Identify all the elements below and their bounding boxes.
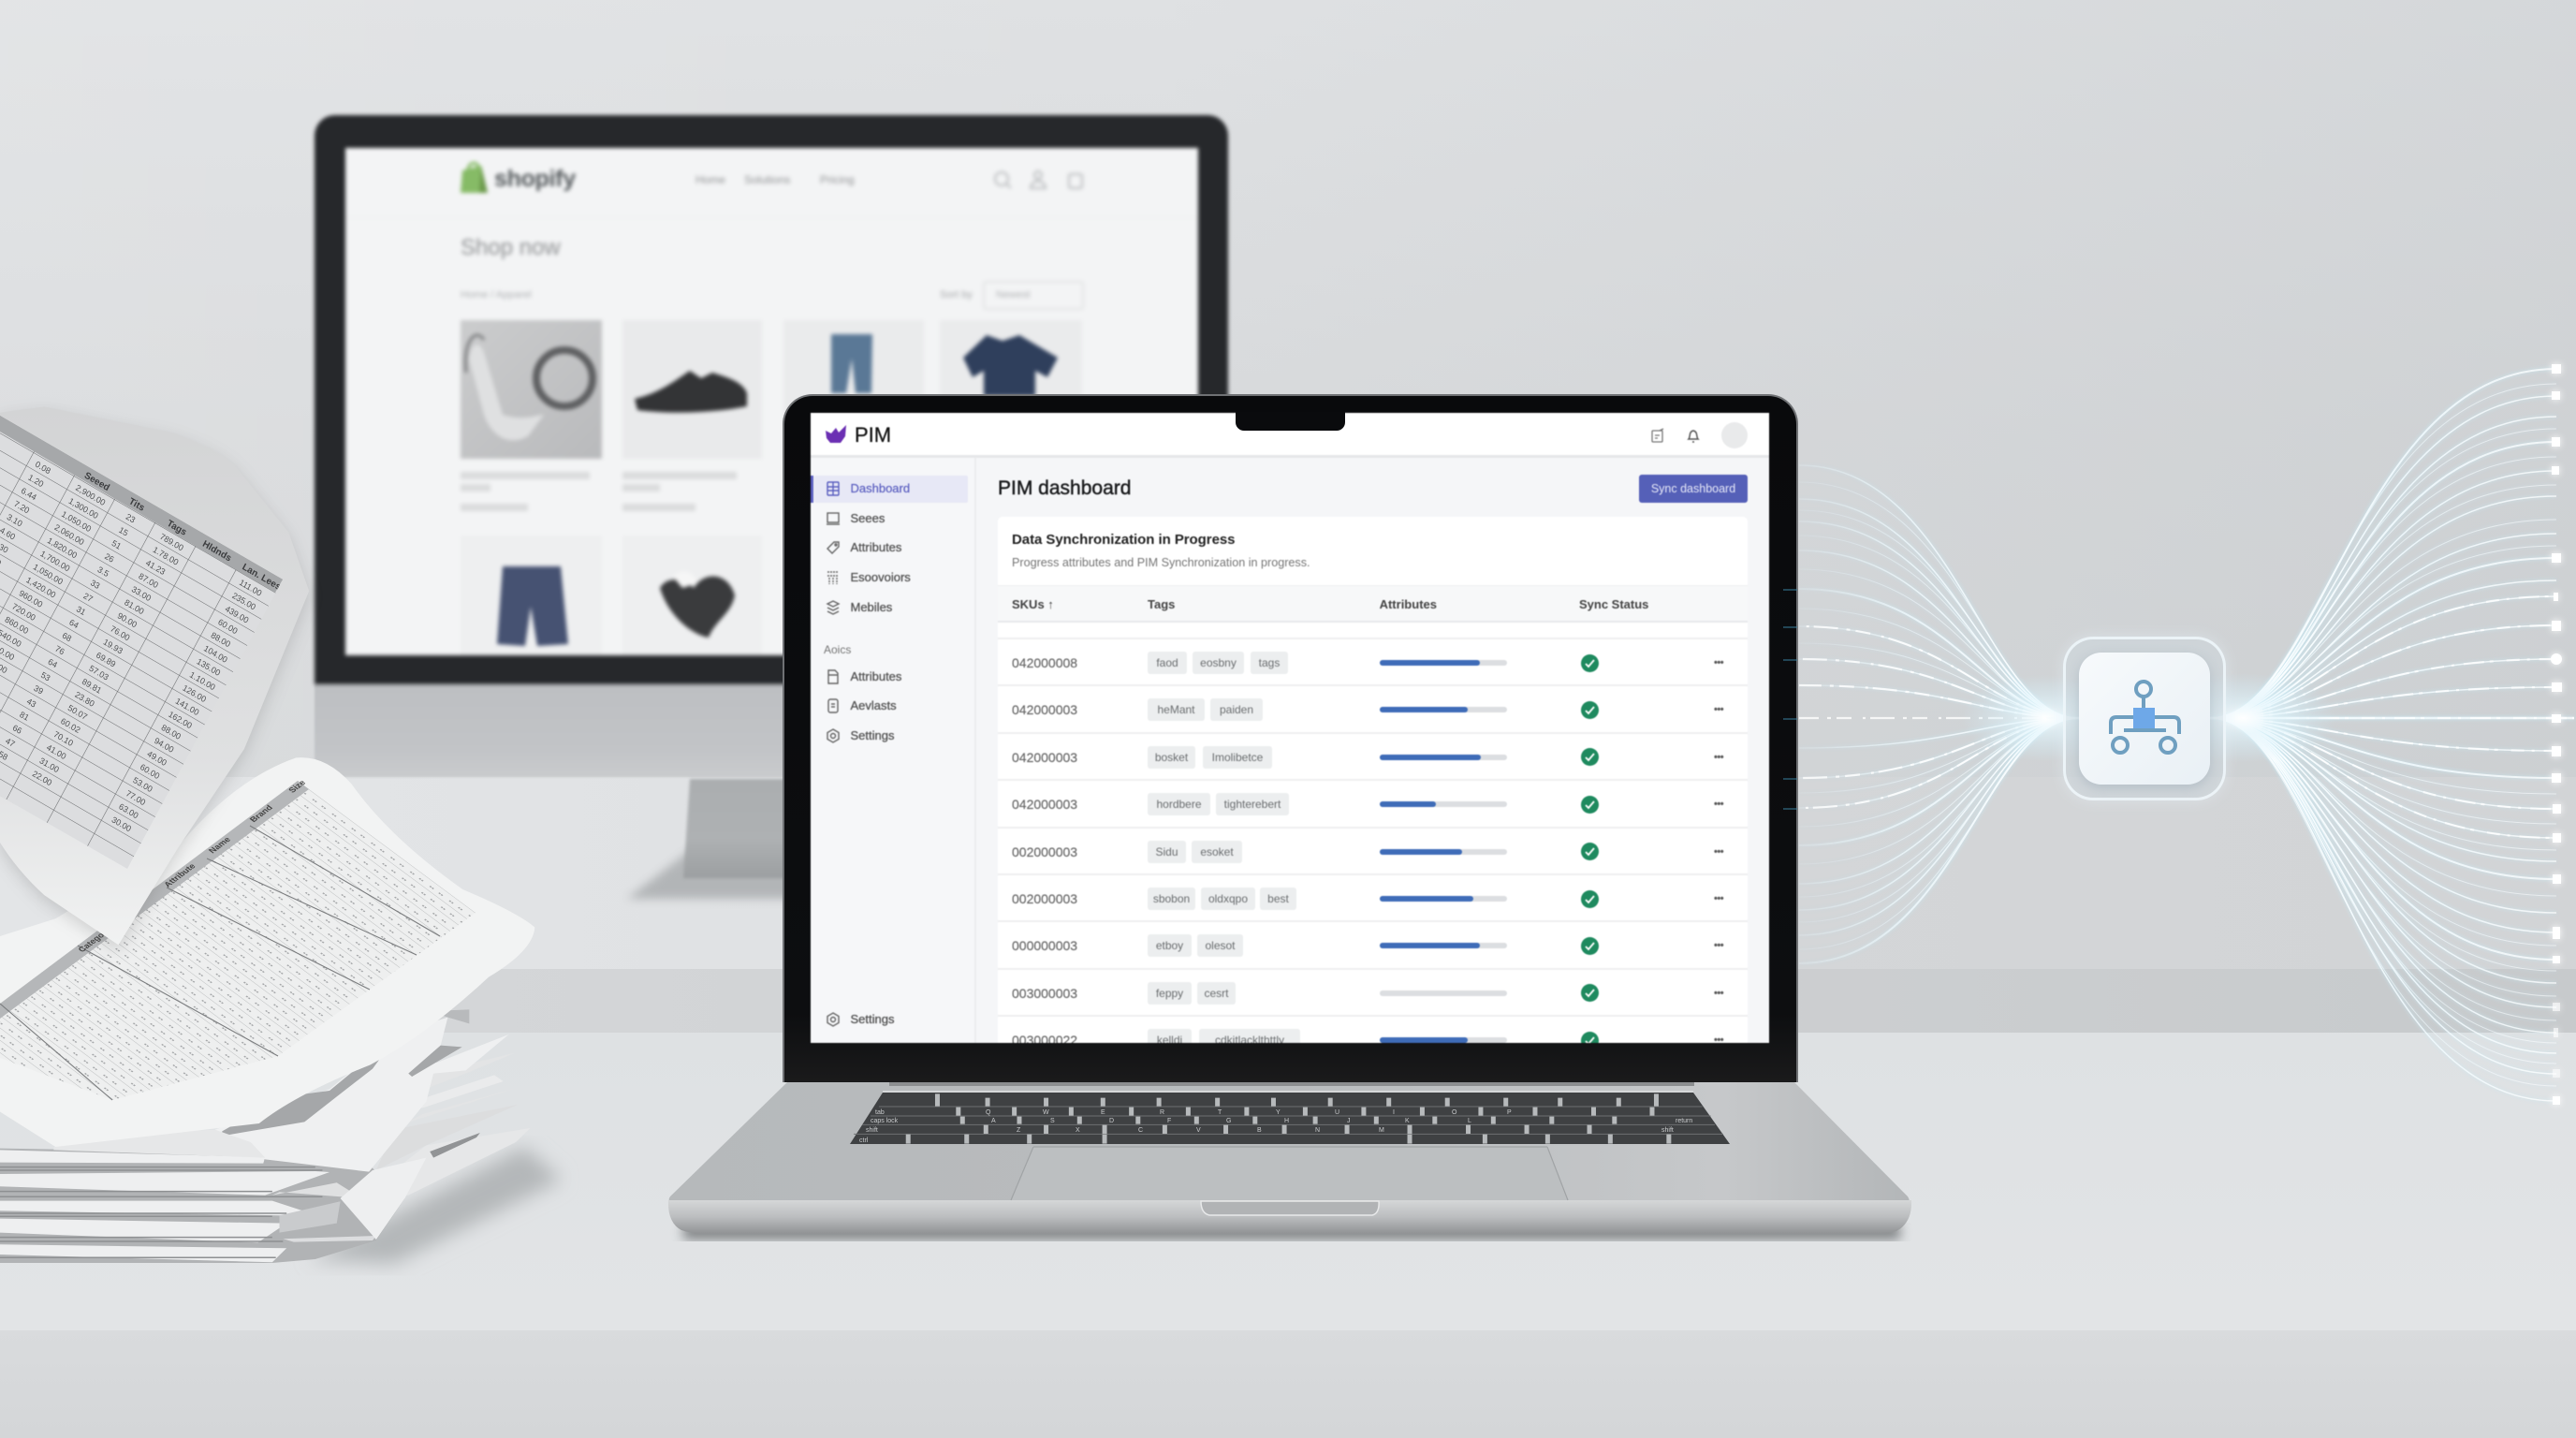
nav: Esoovoiors: Esoovoiors (850, 570, 911, 584)
hinge (889, 1082, 1694, 1086)
keyboard: ctrl (859, 1137, 869, 1144)
upper floating spreadsheet sheet: 1.20 (26, 473, 45, 489)
header: Attributes: Attributes (1380, 597, 1437, 611)
panel: data synchronization table card (998, 517, 1748, 1043)
upper floating spreadsheet sheet: 0.08 (34, 460, 52, 476)
upper floating spreadsheet sheet: 69.89 (95, 651, 117, 669)
product tiles and images (459, 318, 1078, 650)
table row 4: ••• (1714, 799, 1723, 810)
sync button (1639, 475, 1748, 503)
monitor foot shadow (629, 851, 783, 902)
upper floating spreadsheet sheet: 1.78.00 (152, 545, 180, 567)
active item accent (811, 476, 813, 503)
nav: Attributes (826, 540, 902, 554)
keyboard: return (1676, 1118, 1692, 1124)
header: SKUs: SKUs ↑ (1012, 597, 1054, 611)
panel: laptop lid (783, 394, 1798, 1082)
header: Sync Status: Sync Status (1579, 597, 1648, 611)
product: jeans (783, 320, 924, 459)
breadcrumb: Home / Apparel (461, 289, 532, 301)
top bar (811, 413, 1769, 458)
table row 3: Imolibetce (1212, 751, 1263, 764)
upper floating spreadsheet sheet: 81.00 (123, 597, 146, 616)
upper floating spreadsheet sheet: 47 (4, 736, 17, 749)
table row 3: 042000003 (1012, 750, 1077, 765)
nav: Settings: Settings (850, 728, 894, 742)
upper floating spreadsheet sheet: 1,700.00 (38, 549, 71, 573)
upper floating spreadsheet sheet: 63.00 (117, 801, 139, 820)
table row 9 (998, 1017, 1748, 1064)
upper floating spreadsheet sheet: 22.00 (31, 769, 53, 787)
upper floating spreadsheet sheet: 41.00 (45, 742, 67, 761)
upper floating spreadsheet sheet: 57.03 (88, 664, 110, 682)
upper floating spreadsheet sheet: Tits (127, 496, 146, 514)
upper floating spreadsheet sheet: 23 (124, 512, 137, 525)
upper floating spreadsheet sheet: 23.80 (73, 690, 96, 709)
upper floating spreadsheet sheet: 50.07 (66, 703, 89, 722)
table row 1: tags (1259, 656, 1280, 669)
upper floating spreadsheet sheet: 235.00 (230, 591, 257, 612)
upper floating spreadsheet sheet: Lan. Lees (241, 562, 283, 593)
upper floating spreadsheet sheet: 2,900.00 (74, 483, 107, 507)
shelf shadow band (0, 969, 2576, 1033)
stack of sheets (0, 1009, 530, 1263)
upper floating spreadsheet sheet: 90.00 (116, 610, 139, 629)
upper floating spreadsheet sheet: 1,050.00 (32, 562, 65, 587)
table row 2 (998, 686, 1748, 734)
table row 4: 042000003 (1012, 797, 1077, 812)
upper floating spreadsheet sheet: 53 (39, 670, 51, 683)
icon: hierarchy network (2109, 680, 2181, 755)
upper floating spreadsheet sheet: 860.00 (4, 615, 30, 636)
upper floating spreadsheet sheet: 49.00 (146, 749, 168, 768)
laptop shadow (683, 1225, 1900, 1240)
upper floating spreadsheet sheet: 26 (103, 551, 116, 565)
monitor screen (345, 148, 1198, 655)
table row 1: eosbny (1200, 656, 1237, 669)
upper floating spreadsheet sheet: 789.00 (158, 532, 185, 552)
trackpad (1011, 1147, 1568, 1200)
nav: Seees: Seees (850, 511, 885, 525)
table row 6 (998, 875, 1748, 922)
user avatar (1721, 422, 1748, 448)
background wall (0, 0, 2576, 969)
table row 2: 042000003 (1012, 702, 1077, 717)
upper floating spreadsheet sheet: 7.20 (12, 499, 31, 515)
icon: paper pile with printed spreadsheets (0, 406, 562, 1271)
nav: Settings bottom: Settings (850, 1012, 894, 1026)
upper floating spreadsheet sheet: 141.00 (174, 697, 200, 717)
header: Tags: Tags (1148, 597, 1175, 611)
left stream lines (1799, 465, 2079, 963)
table row 5: 002000003 (1012, 844, 1077, 859)
nav: Aevlasts (827, 698, 897, 713)
upper floating spreadsheet sheet: 39 (32, 683, 45, 697)
lower spreadsheet sheet: Name (207, 835, 232, 855)
sidebar (811, 458, 976, 1043)
laptop deck (669, 1082, 1910, 1202)
store nav item: Pricing (820, 173, 855, 186)
upper floating spreadsheet sheet: Seeed (82, 471, 111, 493)
upper floating spreadsheet sheet: 31 (75, 604, 87, 617)
upper floating spreadsheet sheet: 2,060.00 (53, 522, 86, 547)
laptop edge data glow (1783, 589, 1797, 810)
upper floating spreadsheet sheet: 126.00 (181, 683, 208, 704)
upper floating spreadsheet sheet: 3.5 (96, 565, 110, 579)
upper floating spreadsheet sheet: 1.10.00 (188, 669, 217, 692)
sync button: Sync dashboard (1651, 482, 1735, 495)
shopify wordmark: shopify (494, 166, 576, 192)
upper floating spreadsheet sheet: 87.00 (137, 571, 160, 590)
nav: Attributes 2: Attributes (850, 669, 901, 683)
icon: PIM crown logo (825, 425, 847, 444)
upper floating spreadsheet sheet: 720.00 (10, 601, 37, 623)
lower spreadsheet sheet: Category (76, 926, 112, 954)
table row 8: ••• (1714, 988, 1723, 999)
store header icons (992, 169, 1085, 191)
upper floating spreadsheet sheet: 60.00 (139, 762, 161, 781)
product: bag and ring (461, 320, 602, 459)
icon: bell (1687, 429, 1700, 444)
nav: Settings (826, 728, 895, 743)
table row 4: hordbere (1156, 798, 1202, 811)
nav: Settings bottom (826, 1011, 895, 1028)
upper floating spreadsheet sheet: 1,420.00 (24, 575, 57, 600)
shelf surface (0, 777, 2576, 969)
table row 8 (998, 970, 1748, 1017)
table row 8: 003000003 (1012, 986, 1077, 1001)
upper floating spreadsheet sheet: 30.00 (110, 814, 133, 833)
table row 7: olesot (1205, 939, 1236, 952)
store nav item: Solutions (744, 173, 790, 186)
table row 6: ••• (1714, 893, 1723, 904)
nav: Dashboard (826, 481, 910, 496)
upper floating spreadsheet sheet: 960.00 (18, 588, 44, 609)
table row 8: cesrt (1204, 987, 1228, 1000)
table row 6: sbobon (1153, 892, 1190, 905)
table row 5: esoket (1200, 845, 1234, 858)
thumb notch (1201, 1201, 1379, 1215)
card subtitle: Progress attributes and PIM Synchronization in progress. (1012, 556, 1310, 569)
table row 5 (998, 829, 1748, 875)
table row 1: 042000008 (1012, 655, 1077, 670)
upper floating spreadsheet sheet: 43 (25, 697, 37, 710)
upper floating spreadsheet sheet: 68 (61, 630, 73, 643)
product: shorts (461, 536, 602, 655)
table row 6: oldxqpo (1208, 892, 1248, 905)
upper floating spreadsheet sheet: 66 (11, 723, 23, 736)
upper floating spreadsheet sheet: 77.00 (124, 788, 147, 807)
nav: Mebiles (826, 599, 893, 616)
product: dark gloves (622, 536, 762, 655)
table row 3: ••• (1714, 752, 1723, 763)
keyboard (850, 1092, 1730, 1144)
upper floating spreadsheet sheet: 60.02 (59, 716, 81, 735)
nav: Seees (826, 511, 886, 526)
upper floating spreadsheet sheet: 88.00 (210, 630, 232, 649)
panel: sync node outer frame (2063, 637, 2226, 800)
lower spreadsheet sheet: Size (286, 779, 307, 794)
table row 7: 000000003 (1012, 938, 1077, 953)
section label: Aoics: Aoics (824, 643, 851, 656)
keyboard: ASDFGHJKL (991, 1118, 1471, 1124)
spacer rule (998, 638, 1748, 639)
upper floating spreadsheet sheet: 76 (53, 644, 66, 656)
table row 7: etboy (1156, 939, 1183, 952)
data streams converging on the sync node (1783, 361, 2574, 1106)
table row 6: 002000003 (1012, 891, 1077, 906)
panel: laptop keyboard base (668, 1082, 1911, 1241)
product: black shoe (622, 320, 762, 459)
table row 1: faod (1156, 656, 1178, 669)
right dashed data packets (2210, 596, 2574, 838)
table row 1 (998, 639, 1748, 686)
lower spreadsheet sheet (0, 757, 534, 1147)
upper floating spreadsheet sheet: 15 (117, 525, 130, 538)
upper floating spreadsheet sheet: 64 (47, 657, 59, 669)
keyboard: ZXCVBNM (1017, 1127, 1384, 1134)
table row 3: bosket (1155, 751, 1188, 764)
upper floating spreadsheet sheet: 94.00 (153, 736, 175, 755)
left dashed data packets (1799, 626, 2079, 808)
upper floating spreadsheet sheet: 162.00 (167, 710, 194, 730)
active item highlight (814, 476, 968, 503)
keyboard: tab (875, 1109, 885, 1116)
table row 4: tighterebert (1224, 798, 1281, 811)
keyboard: shift (1661, 1127, 1674, 1134)
laptop front edge (668, 1200, 1911, 1233)
table row 8: feppy (1156, 987, 1183, 1000)
upper floating spreadsheet sheet: 1,820.00 (46, 536, 79, 560)
upper floating spreadsheet sheet: 19.93 (102, 637, 124, 656)
upper floating spreadsheet sheet: Hldnds (200, 539, 233, 565)
upper floating spreadsheet sheet: 88.00 (160, 723, 183, 741)
desk front edge (0, 1330, 2576, 1438)
node left glow (1961, 675, 2130, 761)
node right glow (2149, 673, 2336, 763)
desk surface (0, 1033, 2576, 1330)
lower spreadsheet sheet: Attribute (162, 862, 198, 888)
upper floating spreadsheet sheet: 53.00 (131, 775, 154, 794)
upper floating spreadsheet sheet: 76.00 (109, 624, 131, 642)
upper floating spreadsheet sheet: 6.44 (20, 486, 38, 502)
shop now heading: Shop now (461, 235, 561, 260)
sort select: Newest (996, 289, 1031, 301)
upper floating spreadsheet sheet: 1,050.00 (60, 509, 93, 534)
upper floating spreadsheet sheet: 41.23 (144, 558, 167, 577)
upper floating spreadsheet sheet: 1,300.00 (67, 496, 100, 521)
keyboard: caps lock (871, 1118, 899, 1124)
upper floating spreadsheet sheet: 31.00 (38, 756, 61, 774)
table row 2: ••• (1714, 704, 1723, 715)
right stream end nodes (2551, 364, 2562, 1105)
icon: edit (1651, 428, 1664, 444)
upper floating spreadsheet sheet: 3.10 (6, 512, 24, 529)
upper floating spreadsheet sheet: 81 (18, 710, 31, 723)
page title: PIM dashboard (998, 477, 1131, 499)
table row 2: paiden (1220, 703, 1253, 716)
nav: Aevlasts: Aevlasts (850, 698, 897, 712)
table row 7 (998, 922, 1748, 970)
upper floating spreadsheet sheet: 104.00 (202, 643, 229, 665)
lower spreadsheet sheet: Brand (248, 803, 274, 824)
table row 1: ••• (1714, 657, 1723, 668)
store nav: Home (695, 173, 725, 186)
pile shadow on desk (309, 1147, 562, 1264)
PIM logo text: PIM (855, 423, 891, 447)
nav: Attributes: Attributes (850, 540, 901, 554)
nav: Attributes 2 (827, 668, 902, 685)
shopify logo mark (458, 159, 490, 197)
upper floating spreadsheet sheet: 111.00 (238, 578, 263, 598)
upper floating spreadsheet sheet: 70.10 (52, 729, 75, 748)
table row 4 (998, 781, 1748, 829)
table row 6: best (1267, 892, 1289, 905)
keyboard: QWERTYUIOP (986, 1109, 1512, 1116)
monitor stand chin (315, 684, 1228, 777)
upper floating spreadsheet sheet: 27 (81, 591, 95, 604)
upper floating spreadsheet sheet (0, 406, 309, 945)
upper floating spreadsheet sheet: 51 (110, 538, 123, 551)
card title: Data Synchronization in Progress (1012, 532, 1235, 548)
upper floating spreadsheet sheet: 33 (89, 578, 101, 591)
upper floating spreadsheet sheet: 60.00 (216, 617, 239, 636)
store header rule (345, 217, 1198, 218)
nav: Mebiles: Mebiles (850, 600, 892, 614)
monitor stand neck (683, 777, 783, 878)
panel: PIM dashboard screen (811, 413, 1769, 1043)
sync node inner tile (2079, 653, 2210, 785)
nav: Dashboard: Dashboard (850, 481, 910, 495)
upper floating spreadsheet sheet: 64 (67, 617, 80, 630)
sort label: Sort by (940, 289, 973, 301)
table row 7: ••• (1714, 940, 1723, 951)
table row 2: heMant (1157, 703, 1195, 716)
product name lines (461, 472, 737, 511)
table header (998, 585, 1748, 623)
keyboard: shift (866, 1127, 878, 1134)
upper floating spreadsheet sheet: 89.81 (80, 677, 103, 696)
upper floating spreadsheet sheet: 33.00 (130, 584, 153, 603)
upper floating spreadsheet sheet: 439.00 (224, 604, 250, 625)
right stream lines (2210, 369, 2574, 1101)
product: navy t-shirt (940, 320, 1082, 459)
upper floating spreadsheet sheet: 135.00 (196, 656, 222, 678)
table row 5: ••• (1714, 846, 1723, 858)
nav: Esoovoiors (827, 570, 912, 585)
table row 3 (998, 734, 1748, 781)
sort select (983, 281, 1084, 310)
panel: blurred desktop monitor with shopify storefront (315, 115, 1228, 684)
camera notch (1236, 412, 1345, 431)
upper floating spreadsheet sheet: Tags (165, 519, 188, 538)
table row 5: Sidu (1155, 845, 1178, 858)
